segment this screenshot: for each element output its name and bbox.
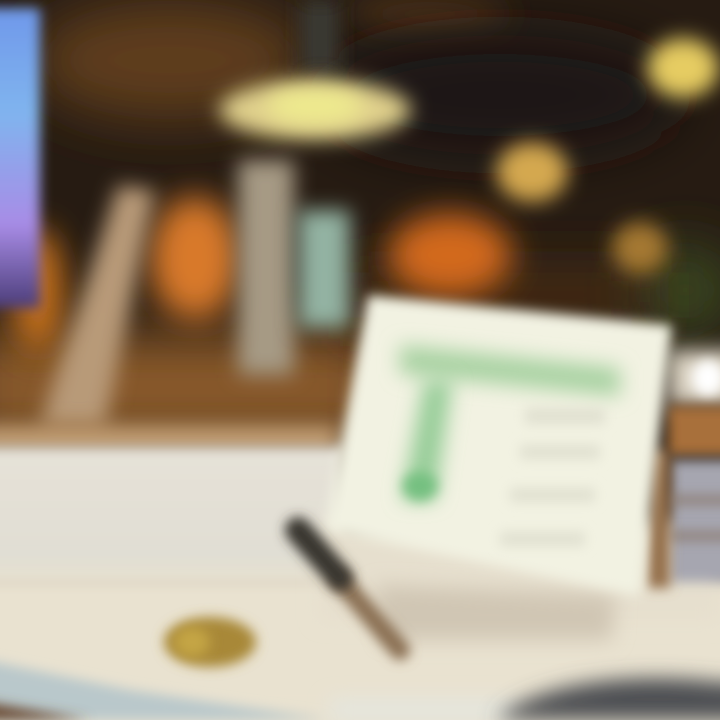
blurred figures and columns (40, 160, 350, 425)
warm background lights (12, 196, 512, 352)
table top (0, 520, 720, 720)
round lights (496, 38, 719, 274)
table back panel (0, 426, 345, 586)
faint text lines (500, 408, 605, 546)
gold coins (164, 617, 256, 667)
green vertical stem (402, 380, 452, 500)
card with green chart (325, 295, 672, 596)
screen on left edge (0, 8, 40, 308)
green header bar (400, 345, 620, 396)
dark object bottom right (495, 678, 720, 720)
pen (298, 530, 400, 650)
pendant lamp (219, 0, 411, 140)
right side objects (648, 350, 720, 588)
card base (375, 585, 615, 640)
